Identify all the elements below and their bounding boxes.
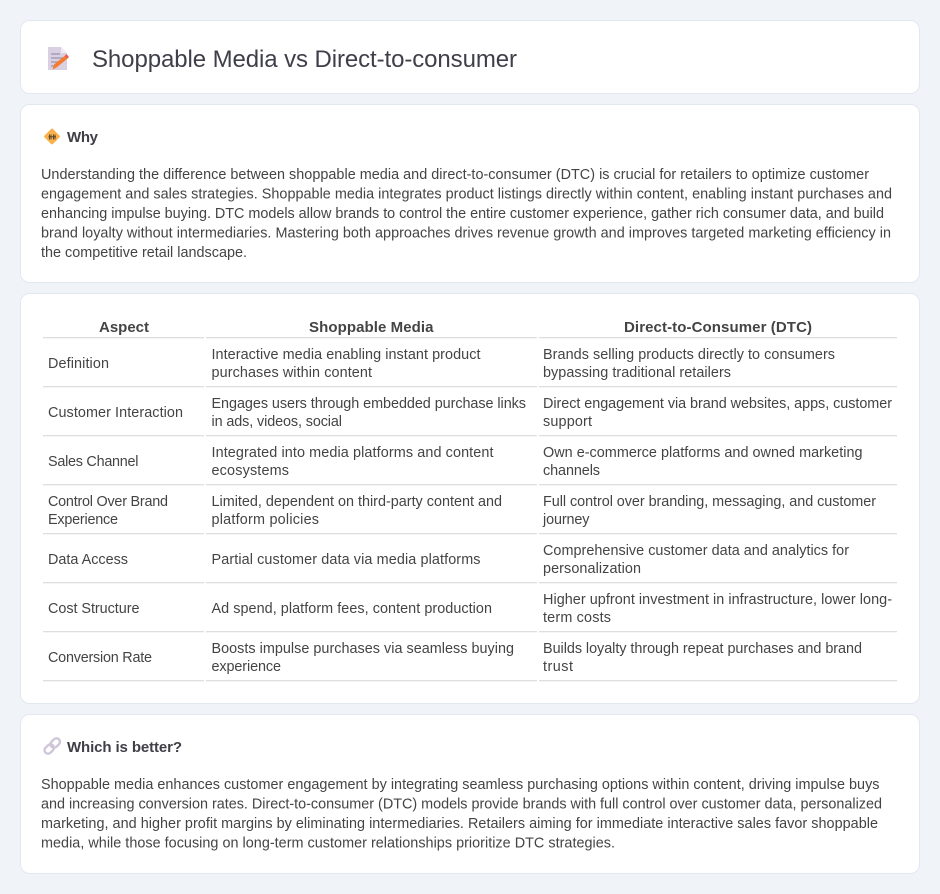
- text block: why paragraph: the competitive retail landscape.: [41, 245, 247, 261]
- text block: which is better paragraph: media, while those focusing on long-term customer relationships prioritize DTC strategies.: [41, 836, 615, 852]
- row: sales channel: [48, 445, 862, 479]
- row: sales channel: ecosystems: [212, 463, 289, 479]
- row: conversion rate: experience: [212, 659, 281, 675]
- table header row: Aspect: [99, 319, 149, 336]
- text block: why paragraph: enhancing impulse buying. DTC models allow brands to control the entire customer experience, gather rich consumer data, and build: [41, 206, 884, 222]
- row: conversion rate: trust: [543, 659, 573, 675]
- panel: comparison table: [20, 294, 920, 704]
- heading: which is better: Which is better?: [67, 739, 182, 756]
- row: customer interaction: Engages users through embedded purchase links: [212, 396, 526, 412]
- row: sales channel: Sales Channel: [48, 454, 138, 470]
- row: customer interaction: [48, 396, 892, 430]
- row: control over brand experience: [48, 494, 876, 528]
- row: sales channel: Integrated into media platforms and content: [212, 445, 494, 461]
- row: data access: [48, 543, 849, 577]
- row: conversion rate: Conversion Rate: [48, 650, 152, 666]
- row: data access: Partial customer data via media platforms: [212, 552, 480, 568]
- row: control over brand experience: Experience: [48, 512, 118, 528]
- text block: why paragraph: [41, 167, 892, 261]
- text block: why paragraph: Understanding the difference between shoppable media and direct-to-consumer (DTC) is crucial for retailers to optimize customer: [41, 167, 869, 183]
- row: conversion rate: Builds loyalty through repeat purchases and brand: [543, 641, 862, 657]
- table header row: [99, 319, 812, 336]
- row: customer interaction: in ads, videos, social: [212, 414, 342, 430]
- text block: which is better paragraph: marketing, and higher profit margins by eliminating intermediaries. Retailers aiming for immediate interactive sales favor shoppable: [41, 816, 878, 832]
- icon: document with pencil: [48, 47, 69, 70]
- row: data access: personalization: [543, 561, 641, 577]
- row: sales channel: Own e-commerce platforms and owned marketing: [543, 445, 862, 461]
- text block: why paragraph: engagement and sales strategies. Shoppable media integrates product listings directly within content, enabling instant purchases and: [41, 186, 892, 202]
- row: definition: Brands selling products directly to consumers: [543, 347, 835, 363]
- row: cost structure: Higher upfront investment in infrastructure, lower long-: [543, 592, 892, 608]
- row: control over brand experience: Control Over Brand: [48, 494, 168, 510]
- row: conversion rate: Boosts impulse purchases via seamless buying: [212, 641, 514, 657]
- table header row: Direct-to-Consumer (DTC): [624, 319, 812, 336]
- row: data access: Data Access: [48, 552, 128, 568]
- row: sales channel: channels: [543, 463, 600, 479]
- row: definition: bypassing traditional retailers: [543, 365, 731, 381]
- icon: chain link: [43, 737, 61, 755]
- panel: why: [20, 104, 920, 282]
- row: cost structure: Cost Structure: [48, 601, 140, 617]
- row: cost structure: [48, 592, 892, 626]
- row: cost structure: term costs: [543, 610, 611, 626]
- header panel: [20, 20, 920, 94]
- row: customer interaction: Direct engagement via brand websites, apps, customer: [543, 396, 892, 412]
- heading: why: Why: [67, 129, 99, 146]
- text block: which is better paragraph: and increasing conversion rates. Direct-to-consumer (DTC) models provide brands with full control over customer data, personalized: [41, 796, 882, 812]
- row: data access: Comprehensive customer data and analytics for: [543, 543, 849, 559]
- row: definition: [48, 347, 835, 381]
- text block: which is better paragraph: [41, 777, 882, 852]
- row: control over brand experience: platform policies: [212, 512, 319, 528]
- panel: which is better: [20, 714, 920, 874]
- text block: which is better paragraph: Shoppable media enhances customer engagement by integrating seamless purchasing options within content, driving impulse buys: [41, 777, 880, 793]
- row: definition: purchases within content: [212, 365, 372, 381]
- row: customer interaction: Customer Interaction: [48, 405, 183, 421]
- text block: why paragraph: brand loyalty without intermediaries. Mastering both approaches drives revenue growth and improves targeted marketing efficiency in: [41, 226, 891, 242]
- row: cost structure: Ad spend, platform fees, content production: [212, 601, 492, 617]
- row: customer interaction: support: [543, 414, 592, 430]
- row: control over brand experience: Limited, dependent on third-party content and: [212, 494, 502, 510]
- row: control over brand experience: Full control over branding, messaging, and customer: [543, 494, 876, 510]
- row: definition: Interactive media enabling instant product: [212, 347, 480, 363]
- icon: diamond sign: [44, 128, 60, 145]
- row: definition: Definition: [48, 356, 109, 372]
- row: control over brand experience: journey: [542, 512, 590, 528]
- row: conversion rate: [48, 641, 862, 675]
- title: Shoppable Media vs Direct-to-consumer: [92, 46, 517, 73]
- table header row: Shoppable Media: [309, 319, 434, 336]
